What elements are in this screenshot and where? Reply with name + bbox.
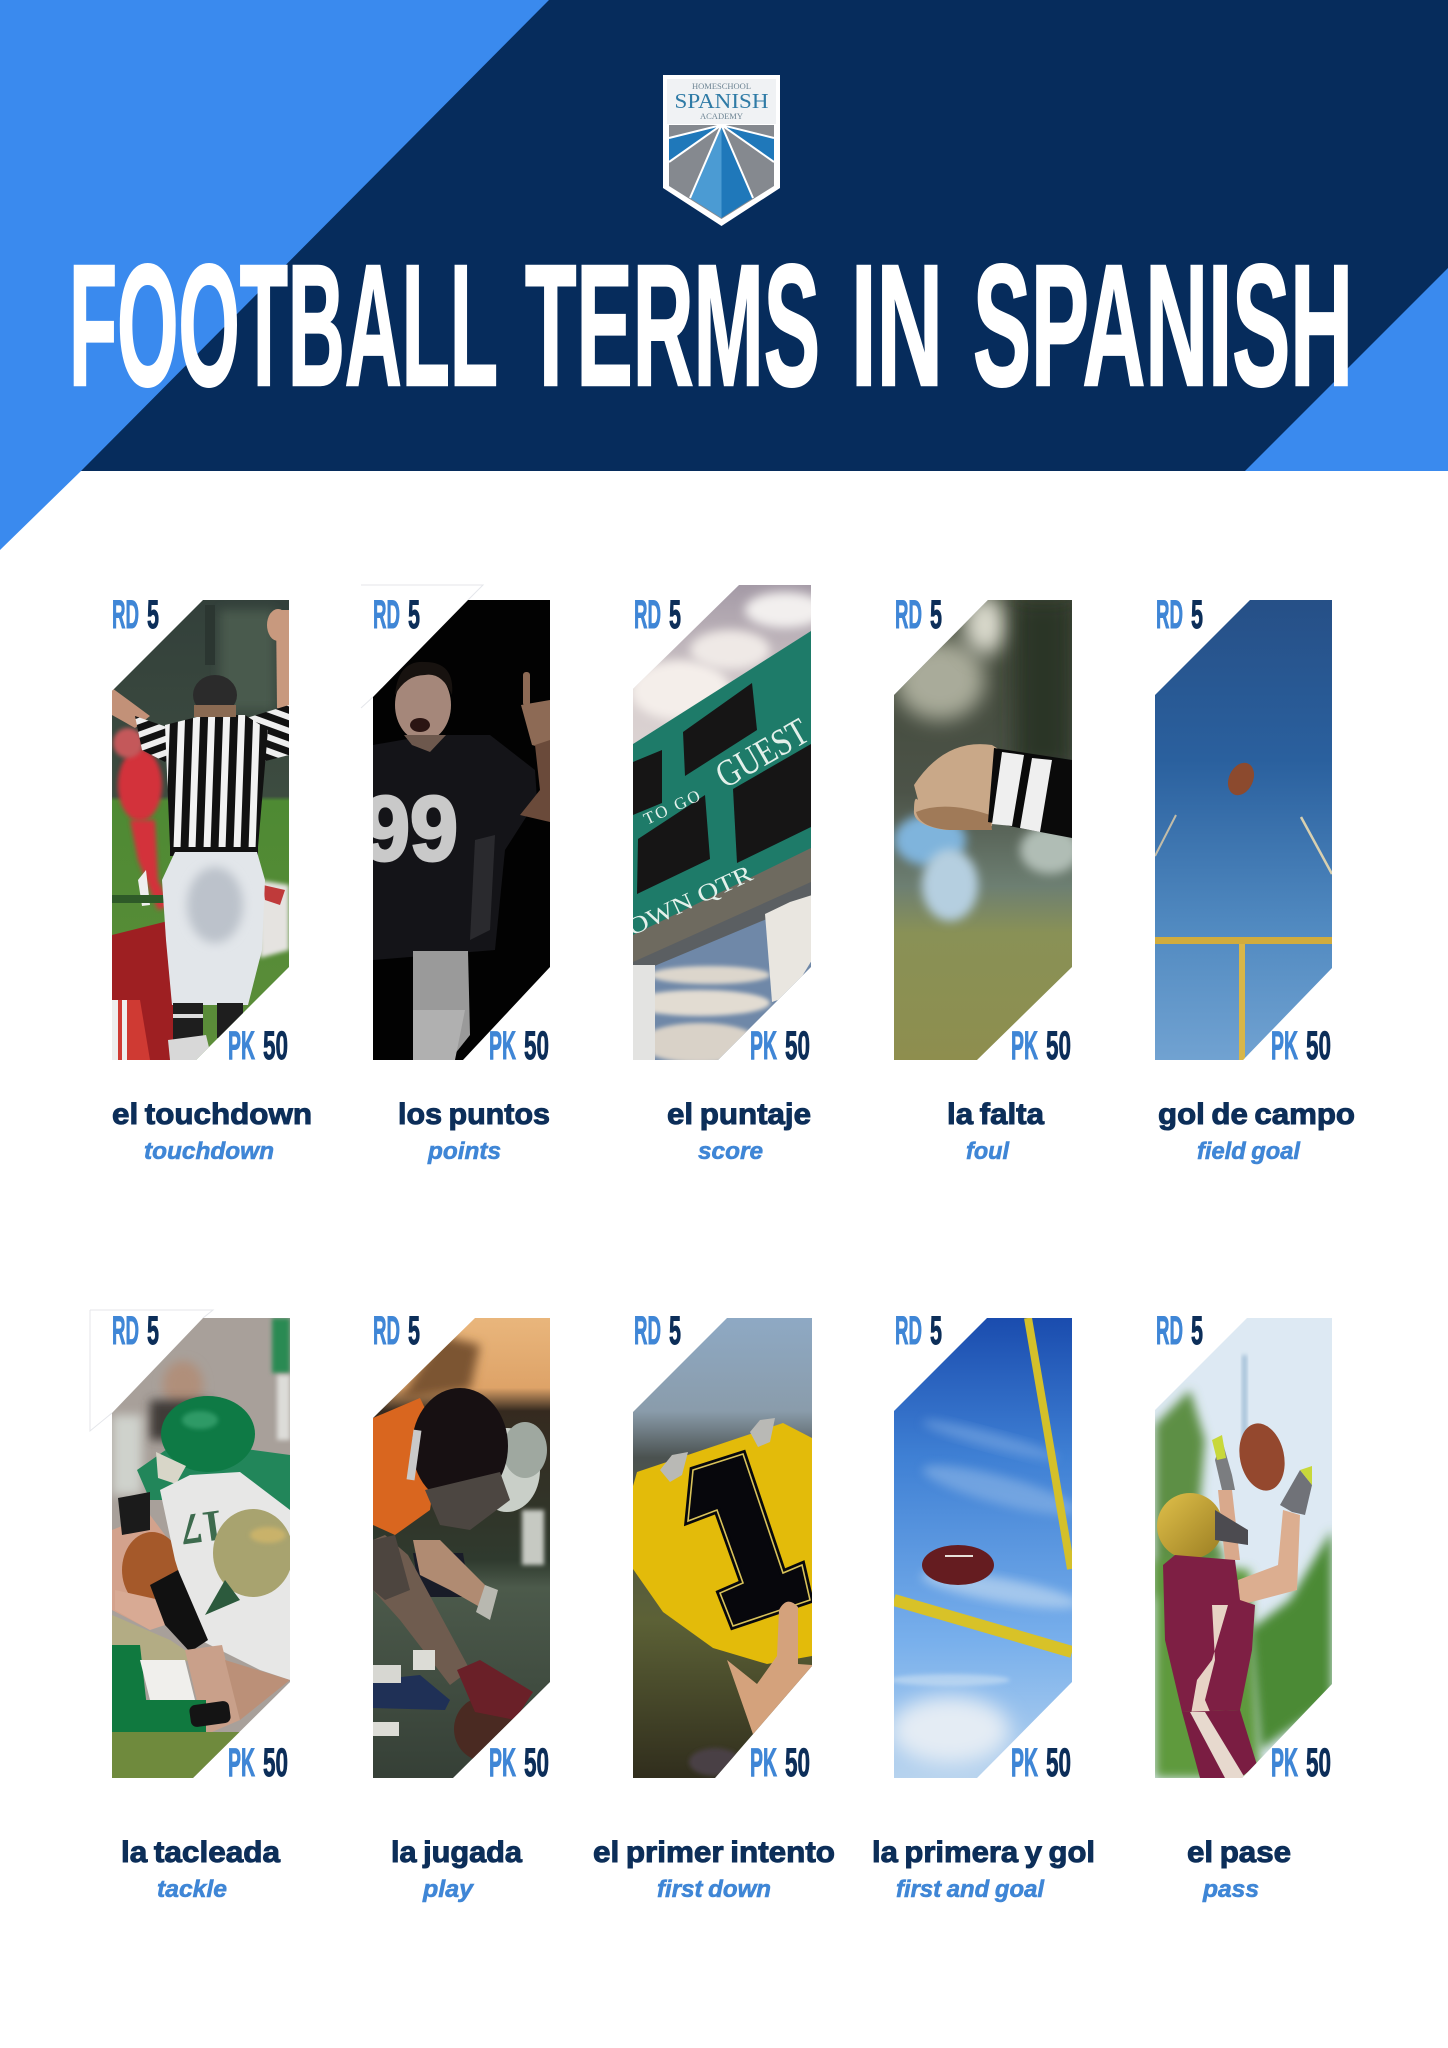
translation: score [698,1138,763,1165]
photo: field goal in the sky [1155,595,1333,1065]
yard marker: PK 50: PK [489,1741,516,1785]
yard marker: PK 50: 50 [263,1741,288,1785]
yard marker: RD 5: 5 [1191,593,1203,637]
photo: linemen at the line of scrimmage [373,1318,551,1783]
translation: pass [1202,1876,1259,1903]
term: los puntos [398,1098,550,1131]
term: el touchdown [112,1098,312,1131]
card: el primer intento [593,1309,835,1903]
translation: first and goal [896,1876,1045,1903]
card: los puntos [361,585,551,1165]
photo: referee signalling [112,585,290,1065]
yard marker: RD 5: RD [1156,593,1183,637]
title: IN [851,228,943,422]
yard marker: PK 50: 50 [785,1024,810,1068]
yard marker: PK 50: 50 [263,1024,288,1068]
translation: play [422,1876,475,1903]
photo: player number 99 [362,595,551,1065]
translation: field goal [1197,1138,1301,1165]
logo: Homeschool Spanish Academy shield: SPANISH [674,89,768,113]
photo: tackle pile: 17 [177,1500,227,1555]
term: el primer intento [593,1836,835,1869]
card: el pase [1155,1309,1333,1903]
yard marker: PK 50: PK [1011,1024,1038,1068]
yard marker: PK 50: PK [750,1024,777,1068]
yard marker: PK 50: PK [228,1024,255,1068]
photo: scoreboard: TO GO [641,786,703,829]
yard marker: PK 50: 50 [524,1024,549,1068]
photo: scoreboard: OWN QTR [624,861,757,941]
translation: tackle [157,1876,227,1903]
yard marker: RD 5: RD [373,1309,400,1353]
translation: touchdown [144,1138,274,1165]
photo: referee fist [894,595,1080,1065]
card: gol de campo [1155,593,1355,1165]
yard marker: RD 5: RD [112,1309,139,1353]
yard marker: PK 50: 50 [524,1741,549,1785]
title: FOOTBALL [69,228,498,422]
term: gol de campo [1158,1098,1355,1131]
photo: scoreboard [633,585,811,1060]
header banner [0,0,1448,550]
photo: scoreboard: GUEST [708,710,816,797]
yard marker: PK 50: PK [489,1024,516,1068]
yard marker: RD 5: RD [112,593,139,637]
yard marker: PK 50: 50 [785,1741,810,1785]
term: la primera y gol [872,1836,1095,1869]
yard marker: RD 5: 5 [930,593,942,637]
translation: foul [966,1138,1010,1165]
term: la jugada [391,1836,522,1869]
yard marker: RD 5: RD [895,593,922,637]
yard marker: PK 50: 50 [1046,1024,1071,1068]
yard marker: RD 5: 5 [669,593,681,637]
term: la tacleada [121,1836,280,1869]
card: la tacleada [90,1309,293,1903]
yard marker: RD 5: 5 [147,1309,159,1353]
yard marker: RD 5: 5 [669,1309,681,1353]
logo: Homeschool Spanish Academy shield [663,75,780,226]
yard marker: PK 50: PK [228,1741,255,1785]
yard marker: PK 50: PK [1011,1741,1038,1785]
logo: Homeschool Spanish Academy shield: ACADEMY [700,111,743,121]
card: la jugada [373,1309,551,1903]
title: TERMS [525,228,820,422]
yard marker: PK 50: PK [750,1741,777,1785]
yard marker: RD 5: 5 [930,1309,942,1353]
yard marker: PK 50: PK [1271,1741,1298,1785]
photo: ball through uprights [890,1318,1081,1783]
light blue right corner [1245,268,1448,471]
term: el puntaje [667,1098,811,1131]
navy banner shape [81,0,1448,471]
yard marker: PK 50: 50 [1046,1741,1071,1785]
light blue left shape [0,0,553,550]
yard marker: PK 50: 50 [1306,1741,1331,1785]
yard marker: PK 50: 50 [1306,1024,1331,1068]
yard marker: RD 5: RD [1156,1309,1183,1353]
card: la falta [894,593,1080,1165]
translation: points [427,1138,501,1165]
yard marker: RD 5: 5 [408,593,420,637]
yard marker: RD 5: RD [634,1309,661,1353]
faint outline behind card [361,585,483,708]
term: la falta [947,1098,1044,1131]
yard marker: PK 50: PK [1271,1024,1298,1068]
translation: first down [657,1876,771,1903]
photo: first down marker [633,1318,812,1783]
photo: receiver catching the pass [1155,1318,1333,1783]
card: la primera y gol [872,1309,1095,1903]
logo: Homeschool Spanish Academy shield: HOMESCHOOL [692,81,751,91]
photo: tackle pile [112,1318,293,1783]
yard marker: RD 5: 5 [1191,1309,1203,1353]
term: el pase [1187,1836,1291,1869]
yard marker: RD 5: 5 [408,1309,420,1353]
yard marker: RD 5: 5 [147,593,159,637]
card: el touchdown [112,585,312,1165]
yard marker: RD 5: RD [634,593,661,637]
yard marker: RD 5: RD [895,1309,922,1353]
card: el puntaje [633,585,811,1160]
faint outline behind card [90,1310,213,1431]
yard marker: RD 5: RD [373,593,400,637]
photo: player number 99: 99 [362,778,458,880]
